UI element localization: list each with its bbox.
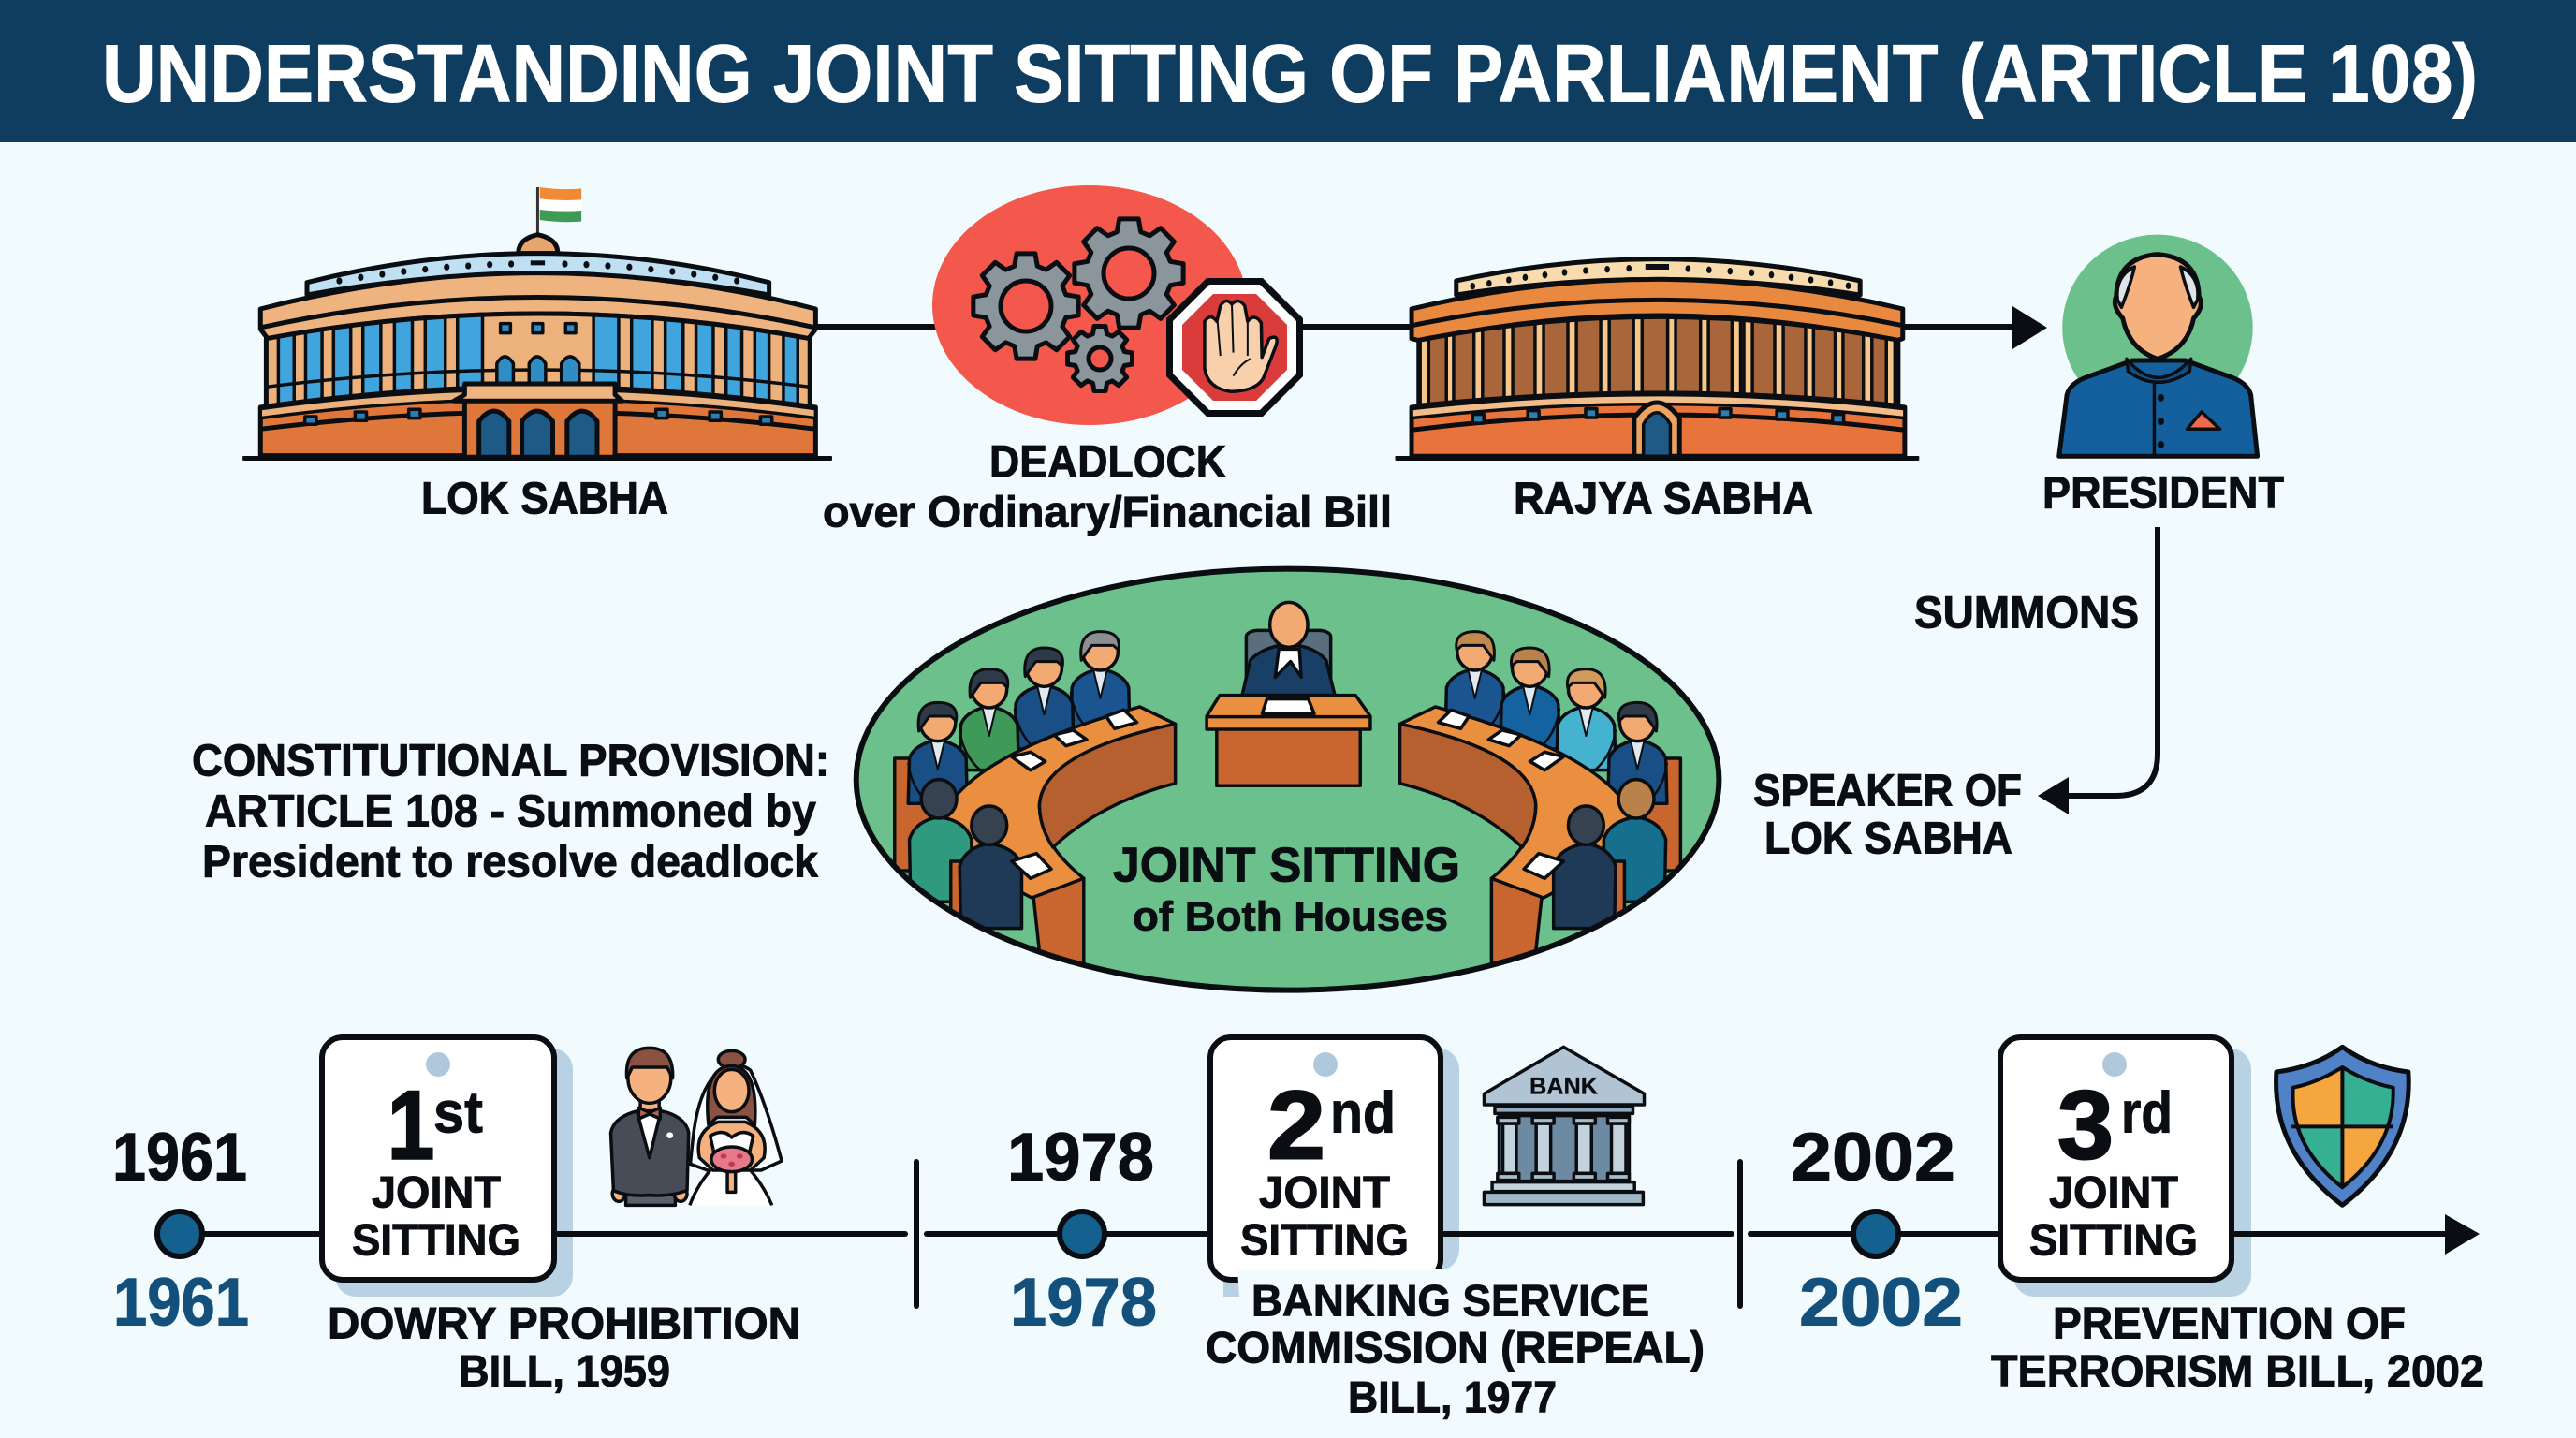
text block: constitutional provision: ARTICLE 108 - Summoned by [205,786,816,837]
card text: SITTING [2029,1215,2198,1264]
icon: bank [1484,1047,1645,1205]
year label top: 1961 [112,1120,247,1195]
label: Speaker of Lok Sabha [1753,766,2022,863]
text block: constitutional provision [192,736,829,888]
label: Rajya Sabha: RAJYA SABHA [1514,474,1813,524]
timeline entry: 2002 [1791,1037,2484,1395]
ordinal: rd [2121,1080,2173,1146]
ordinal: 2 [1267,1071,1325,1180]
card text: SITTING [352,1215,520,1264]
background mask behind bill name [1237,1269,1474,1311]
label: deadlock [823,438,1392,536]
panel: joint sitting chamber [856,569,1719,990]
arrow: connectors in top flow [812,306,2047,349]
timeline entry: 1961 [112,1037,800,1395]
header bar [0,0,2576,142]
label: summons: SUMMONS [1914,588,2139,638]
ordinal [388,1071,483,1180]
ordinal: 1 [388,1071,434,1180]
label: Speaker of Lok Sabha: LOK SABHA [1764,814,2012,863]
ordinal [1267,1071,1396,1180]
icon: Rajya Sabha building [1396,259,1919,461]
pin [1313,1052,1338,1077]
ordinal: nd [1330,1080,1396,1146]
bill name: COMMISSION (REPEAL) [1206,1322,1705,1372]
card text: SITTING [1240,1215,1409,1264]
year label top: 1978 [1007,1120,1154,1195]
timeline line with dividers and arrow [180,1159,2480,1309]
icon: President [2059,235,2258,456]
bill name: BILL, 1977 [1348,1372,1557,1421]
panel: left bench [895,632,1176,964]
marker [1853,1211,1898,1256]
card text: JOINT [2049,1167,2178,1217]
label: Lok Sabha: LOK SABHA [421,474,668,524]
marker [157,1211,202,1256]
bill name [1991,1298,2484,1395]
text block: constitutional provision: President to resolve deadlock [202,837,818,888]
icon: bank: BANK [1530,1073,1598,1099]
card text: JOINT [372,1167,501,1217]
icon: stop sign with hand [1166,278,1303,417]
icon: shield [2274,1047,2411,1205]
bill name [1206,1275,1705,1421]
ordinal: 3 [2057,1071,2114,1180]
label: deadlock: over Ordinary/Financial Bill [823,487,1392,536]
label: joint sitting: JOINT SITTING [1113,839,1460,893]
card text [352,1167,520,1264]
icon: deadlock [932,185,1303,425]
card text: JOINT [1259,1167,1390,1217]
year label bottom: 2002 [1799,1266,1963,1341]
icon: Speaker at podium [1207,602,1370,785]
icon: large gear [1075,219,1183,328]
label: deadlock: DEADLOCK [989,438,1226,487]
bill name [328,1298,800,1395]
icon: bride and groom [611,1048,782,1205]
pin [426,1052,450,1077]
timeline entry: 1978 [1007,1037,1705,1421]
ordinal: st [433,1080,483,1146]
ordinal [2057,1071,2173,1180]
bill name: DOWRY PROHIBITION [328,1298,800,1348]
bill name: PREVENTION OF [2053,1298,2406,1348]
label: President: PRESIDENT [2042,468,2284,519]
marker [1060,1211,1105,1256]
card shadows [335,1049,2251,1297]
bill name: BILL, 1959 [459,1346,670,1395]
icon: small gear [1068,327,1132,390]
pin [2102,1052,2127,1077]
year label bottom: 1978 [1010,1266,1157,1341]
label: Speaker of Lok Sabha: SPEAKER OF [1753,766,2022,816]
card [1210,1037,1441,1280]
text block: constitutional provision: CONSTITUTIONAL PROVISION: [192,736,829,786]
bill name: TERRORISM BILL, 2002 [1991,1346,2484,1395]
bill name: BANKING SERVICE [1251,1275,1649,1326]
card text [2029,1167,2198,1264]
card [322,1037,554,1280]
card [2000,1037,2232,1280]
arrow: President summons Speaker [2038,527,2158,814]
card text [1240,1167,1409,1264]
label: of both houses: of Both Houses [1133,893,1448,940]
year label bottom: 1961 [113,1266,249,1341]
panel: right bench [1400,632,1680,964]
icon: left gear [973,254,1078,359]
year label top: 2002 [1791,1120,1955,1195]
icon: Lok Sabha building [242,187,832,461]
